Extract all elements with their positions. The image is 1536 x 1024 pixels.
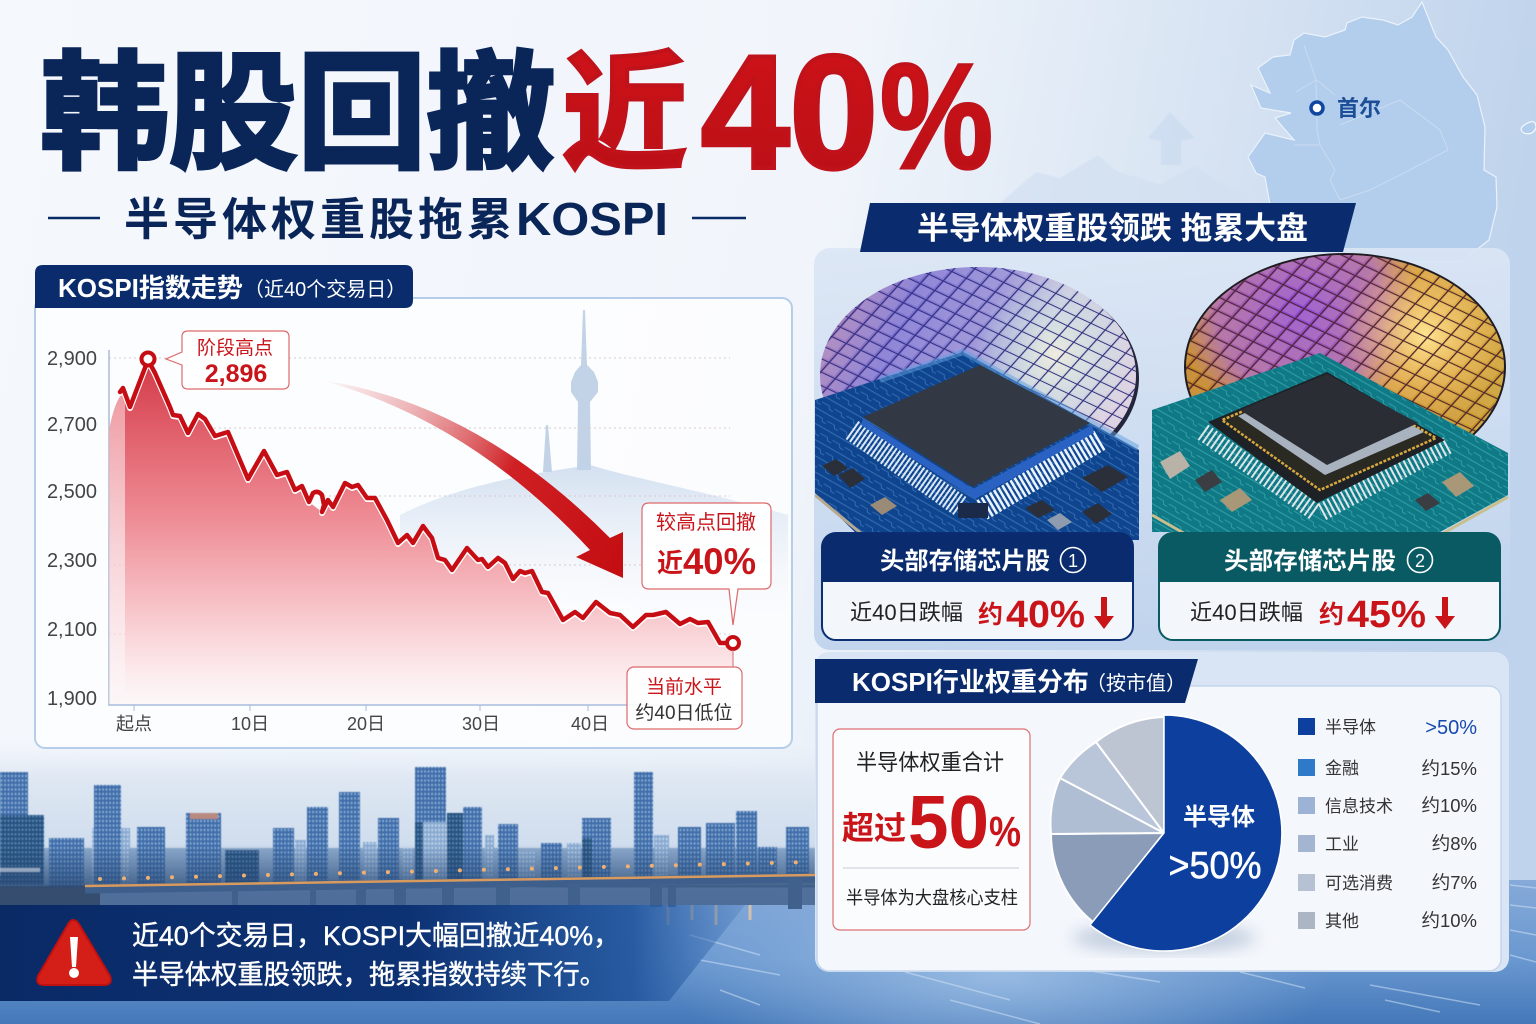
callout: stage high: 2,896 [205, 360, 267, 388]
legend: 半导体 [1325, 718, 1376, 737]
background: sky above city [0, 735, 820, 900]
y axis labels: 2,700 [47, 414, 97, 436]
panel: bottom summary banner [0, 905, 745, 1001]
legend: 金融 [1325, 759, 1359, 778]
x axis labels [116, 714, 609, 734]
section header: sector weights: KOSPI行业权重分布 [852, 667, 1089, 697]
y axis labels [47, 348, 97, 710]
panel: bottom summary banner: 半导体权重股领跌，拖累指数持续下行。 [132, 960, 606, 990]
x axis labels: 起点 [116, 714, 152, 734]
legend: 可选消费 [1325, 874, 1393, 893]
pie chart: 半导体 [1183, 804, 1255, 831]
pie chart: >50% [1168, 845, 1262, 887]
icon: warning triangle [37, 920, 111, 985]
title [40, 22, 993, 203]
section header: semiconductor [860, 203, 1356, 252]
card: stock 1: 近40日跌幅 [850, 600, 963, 625]
background: Korea map with Seoul marker [1248, 2, 1536, 262]
small components 2 [1160, 451, 1474, 512]
panel: bottom summary banner: 近40个交易日，KOSPI大幅回撤近40%， [132, 921, 620, 951]
chip pins [852, 430, 960, 506]
subtitle [48, 193, 746, 245]
chart header tag: （近40个交易日） [244, 278, 406, 301]
callout: current level: 约40日低位 [635, 702, 733, 724]
card: stock 1: 约 [978, 601, 1003, 629]
image: wafer and chip 1 [815, 267, 1139, 540]
y axis labels: 2,100 [47, 619, 97, 641]
x axis labels: 20日 [347, 714, 385, 734]
panel: semiconductor stocks [814, 248, 1510, 650]
subtitle: KOSPI [516, 193, 668, 245]
y axis labels: 2,300 [47, 550, 97, 572]
title: % [880, 32, 993, 200]
panel: sector weights [815, 652, 1509, 972]
legend: 约10% [1421, 910, 1477, 931]
card: stock 2: 2 [1415, 551, 1425, 571]
legend: >50% [1425, 717, 1477, 739]
card: stock 2: 近40日跌幅 [1190, 600, 1303, 625]
card: stock 1 [822, 533, 1133, 640]
background: faint pagoda and mountains [1000, 112, 1265, 240]
city skyline [0, 767, 815, 888]
legend: 约8% [1432, 833, 1477, 854]
callout: current level: 当前水平 [646, 676, 722, 698]
panel: KOSPI chart [35, 265, 792, 748]
y axis labels: 1,900 [47, 688, 97, 710]
callout: semiconductor total: 超过 [842, 810, 906, 846]
pie chart [1051, 715, 1282, 952]
water and riverbank [0, 876, 1536, 1024]
callout: drawdown near 40% [642, 503, 771, 625]
background: Namsan tower and hills [400, 310, 788, 620]
chart header tag: KOSPI指数走势 [58, 273, 243, 303]
subtitle: 半导体权重股拖累 [124, 194, 512, 245]
callout: drawdown near 40%: 较高点回撤 [656, 511, 756, 534]
callout: semiconductor total: 半导体权重合计 [856, 750, 1004, 775]
callout: drawdown near 40%: 40% [683, 541, 756, 582]
arrow: sharp decline [320, 380, 623, 578]
label: Seoul: 首尔 [1337, 96, 1381, 121]
card: stock 2: 约 [1319, 601, 1344, 629]
card: stock 1: 头部存储芯片股 [880, 548, 1050, 575]
card: stock 2: 头部存储芯片股 [1224, 548, 1396, 575]
chart header tag [35, 265, 413, 308]
legend [1298, 717, 1477, 931]
section header: sector weights [815, 659, 1198, 703]
callout: semiconductor total: 半导体为大盘核心支柱 [846, 888, 1018, 908]
y axis labels: 2,900 [47, 348, 97, 370]
callout: semiconductor total [833, 729, 1030, 930]
area under index line [109, 360, 733, 704]
end marker [727, 637, 739, 649]
callout: semiconductor total: % [989, 808, 1021, 856]
callout: semiconductor total: 50 [908, 780, 989, 864]
bridge with street lamps [85, 862, 815, 909]
x axis labels: 10日 [231, 714, 269, 734]
legend: 其他 [1325, 912, 1359, 931]
grid lines and axes [109, 350, 740, 711]
y axis labels: 2,500 [47, 481, 97, 503]
x axis labels: 40日 [571, 714, 609, 734]
legend: 工业 [1325, 835, 1359, 854]
callout: drawdown near 40%: 近 [657, 548, 683, 578]
x axis labels: 30日 [462, 714, 500, 734]
index line [120, 360, 733, 644]
card: stock 2: 45% [1347, 594, 1426, 636]
title: 近 [562, 43, 687, 186]
card: stock 1: 1 [1068, 551, 1078, 571]
peak marker [142, 352, 154, 366]
section header: semiconductor: 半导体权重股领跌 拖累大盘 [917, 211, 1308, 246]
legend: 约7% [1432, 872, 1477, 893]
legend: 信息技术 [1325, 797, 1393, 816]
small components [822, 459, 1128, 524]
legend: 约10% [1421, 795, 1477, 816]
callout: stage high [166, 331, 289, 389]
section header: sector weights: （按市值） [1086, 672, 1186, 695]
title: 40 [701, 22, 878, 203]
callout: current level [627, 650, 742, 729]
image: wafer and chip 2 [1152, 253, 1508, 535]
card: stock 1: 40% [1006, 594, 1085, 636]
card: stock 2 [1159, 533, 1500, 640]
chip 2 pins [1203, 432, 1315, 512]
title: 韩股回撤 [40, 43, 555, 186]
callout: stage high: 阶段高点 [197, 337, 273, 359]
legend: 约15% [1421, 758, 1477, 779]
